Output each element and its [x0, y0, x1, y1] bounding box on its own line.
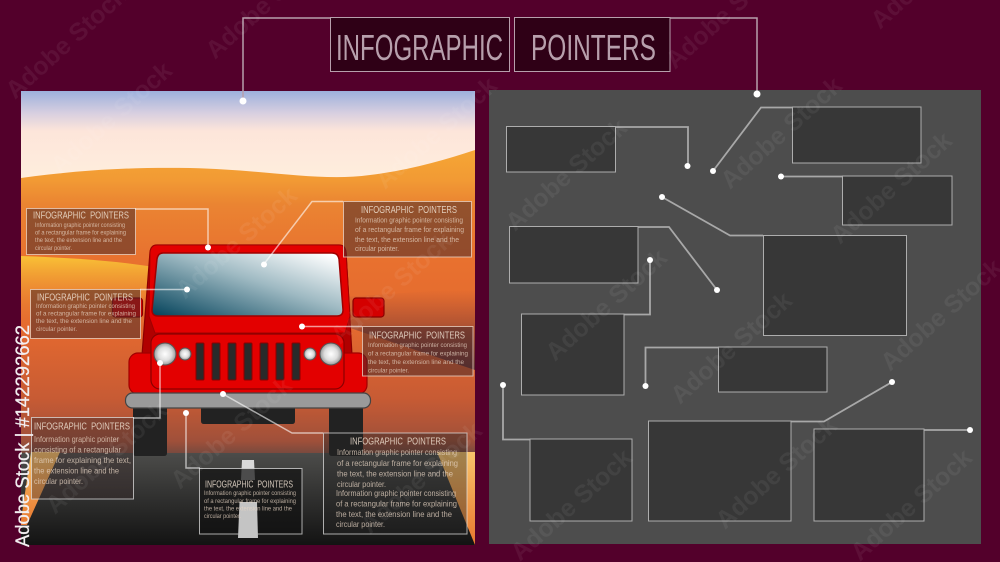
callout: pointer hood: [299, 324, 473, 376]
callout: pointer bumper: Information graphic pointer consisting: [337, 447, 457, 457]
callout: pointer top left: circular pointer.: [35, 245, 72, 252]
callout: pointer windshield right: [261, 202, 472, 268]
watermarks: Adobe Stock: [325, 226, 458, 349]
callout: pointer underbody: INFOGRAPHIC POINTERS: [205, 480, 293, 490]
callout: pointer windshield left: Information graphic pointer consisting: [36, 303, 135, 310]
callout: pointer hood: of a rectangular frame for explaining: [368, 350, 468, 358]
callout: pointer hood: circular pointer.: [368, 368, 409, 374]
callout: pointer underbody: the text, the extension line and the: [204, 506, 293, 512]
callout: pointer headlight: Information graphic pointer: [34, 434, 119, 444]
illustration: red jeep: [112, 245, 384, 456]
watermarks: Adobe Stock: [715, 71, 848, 194]
watermarks: Adobe Stock: [710, 411, 843, 534]
callout: pointer underbody: circular pointer.: [204, 514, 241, 520]
callout: pointer bumper: Information graphic pointer consisting: [336, 488, 456, 498]
callout: pointer top left: INFOGRAPHIC POINTERS: [33, 210, 129, 222]
callout: pointer headlight: INFOGRAPHIC POINTERS: [34, 422, 130, 432]
title: infographic pointers: [240, 18, 760, 104]
panel: desert scene: [21, 91, 475, 545]
callout: pointer top left: [26, 208, 211, 254]
callout: pointer windshield left: of a rectangular frame for explaining: [36, 310, 136, 318]
watermarks: Adobe Stock: [540, 243, 673, 366]
watermarks: Adobe Stock: [500, 113, 633, 236]
callout: pointer top left: of a rectangular frame for explaining: [35, 230, 126, 236]
credit: vertical stock id: Adobe Stock | #142292662: [13, 325, 34, 547]
callout: pointer windshield right: INFOGRAPHIC POINTERS: [361, 205, 457, 216]
callout: pointer windshield left: the text, the extension line and the: [36, 318, 132, 325]
callout: pointer bumper: of a rectangular frame for explaining: [336, 498, 457, 508]
callout: pointer bumper: circular pointer.: [337, 479, 386, 489]
callout: pointer bumper: of a rectangular frame for explaining: [337, 458, 458, 468]
callout: pointer hood: the text, the extension line and the: [368, 359, 464, 366]
callout: pointer headlight: frame for explaining the text,: [34, 455, 131, 465]
callout: pointer hood: Information graphic pointer consisting: [368, 342, 467, 349]
watermarks: Adobe Stock: [170, 181, 303, 304]
watermarks: Adobe Stock: [355, 416, 488, 539]
callout: pointer bumper: the text, the extension line and the: [337, 468, 453, 478]
callout: pointer windshield left: circular pointer.: [36, 326, 77, 333]
callout: pointer windshield right: Information graphic pointer consisting: [355, 216, 463, 224]
callout: pointer windshield right: of a rectangular frame for explaining: [355, 225, 464, 234]
watermarks: Adobe Stock: [45, 56, 178, 179]
callout: pointer top left: Information graphic pointer consisting: [35, 222, 125, 229]
callout: pointer headlight: [32, 360, 163, 499]
callout: pointer underbody: [183, 410, 302, 538]
watermarks: Adobe Stock: [40, 396, 173, 519]
callout: pointer windshield right: circular pointer.: [355, 244, 399, 253]
title: infographic pointers: POINTERS: [531, 27, 656, 68]
panel: blank pointer templates: [489, 90, 981, 544]
callout: pointer underbody: of a rectangular frame for explaining: [204, 499, 296, 505]
watermarks: Adobe Stock: [665, 286, 798, 409]
watermarks: Adobe Stock: [370, 71, 503, 194]
callout: pointer windshield right: the text, the extension line and the: [355, 235, 459, 244]
callout: pointer bumper: circular pointer.: [336, 519, 385, 529]
callout: pointer windshield left: [30, 286, 190, 338]
callout: pointer windshield left: INFOGRAPHIC POINTERS: [37, 292, 133, 304]
title: infographic pointers: INFOGRAPHIC: [336, 27, 503, 68]
callout: pointer headlight: circular pointer.: [34, 476, 83, 486]
callout: pointer bumper: [220, 391, 467, 534]
watermarks: Adobe Stock: [165, 371, 298, 494]
callout: pointer bumper: the text, the extension line and the: [336, 509, 452, 519]
callout: pointer top left: the text, the extension line and the: [35, 237, 122, 244]
callout: pointer bumper: INFOGRAPHIC POINTERS: [350, 436, 446, 448]
callout: pointer hood: INFOGRAPHIC POINTERS: [369, 330, 465, 342]
callout: pointer headlight: the extension line and the: [34, 466, 119, 476]
callout: pointer headlight: consisting of a rectangular: [34, 444, 121, 454]
watermarks: Adobe Stock: [825, 126, 958, 249]
callout: pointer underbody: Information graphic pointer consisting: [204, 491, 296, 497]
